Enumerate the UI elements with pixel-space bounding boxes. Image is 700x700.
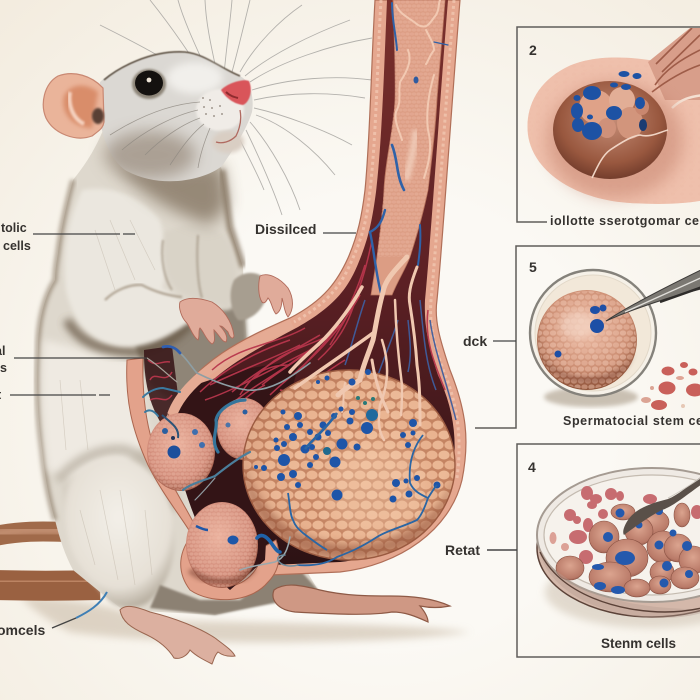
lower body fur — [150, 570, 318, 615]
nostril — [226, 92, 238, 98]
muzzle — [196, 89, 244, 131]
panel: middle — [463, 246, 700, 428]
lower left fur — [42, 340, 150, 480]
sheath: cord and scrotal wall — [165, 0, 466, 575]
panel frame: bottom — [517, 444, 700, 657]
panel frame: top — [517, 27, 700, 222]
blue and grey vessels in cavity — [143, 346, 310, 570]
cell sphere — [537, 290, 637, 390]
petri dish — [537, 468, 700, 628]
interior cavity — [180, 0, 455, 565]
callout: retat — [445, 542, 517, 558]
red cells scattered — [641, 362, 700, 410]
large cell clusters — [556, 503, 700, 597]
hand: right — [259, 275, 292, 317]
caption: top panel: iollotte sserotgomar cel — [550, 214, 700, 228]
callout: dissilced — [255, 221, 356, 237]
callout: tolic cells: cells — [3, 239, 31, 253]
dish front rim — [538, 545, 700, 618]
upper dark cavity — [144, 346, 178, 425]
reproductive cut-away — [127, 0, 466, 600]
nose — [221, 80, 251, 105]
dish shadow — [544, 387, 638, 407]
hand: left — [179, 298, 234, 344]
arm fold — [105, 285, 182, 300]
cord texture — [377, 0, 445, 257]
panel: bottom — [445, 444, 700, 657]
callout: tolic cells — [1, 221, 135, 253]
head — [99, 52, 253, 181]
big testis — [240, 257, 460, 565]
blue vessels on big testis — [288, 413, 437, 565]
callout: dck: dck — [463, 333, 487, 349]
dish shadow — [542, 579, 700, 630]
blue spots — [571, 71, 647, 140]
callout: al s — [0, 344, 147, 375]
callout: t — [0, 388, 110, 402]
red vessels — [148, 240, 445, 425]
small testis C — [186, 502, 258, 588]
spoon — [623, 474, 700, 535]
pink tissue — [527, 28, 700, 204]
fur edge shading — [37, 180, 73, 520]
cavity blue vessels — [345, 300, 456, 420]
small testis A — [147, 413, 215, 491]
arch band — [172, 324, 292, 415]
blue cells — [554, 304, 606, 358]
chest fold lines — [162, 235, 202, 298]
caption: bottom panel: Stenm cells — [601, 636, 676, 651]
caption: middle panel: Spermatocial stem ce — [563, 414, 700, 428]
lower dark cavity — [170, 360, 300, 590]
mouth — [216, 110, 241, 143]
panel frame: middle — [475, 246, 700, 428]
panel number: 5: 5 — [529, 259, 537, 275]
muzzle dots — [202, 97, 223, 117]
neck shading — [118, 165, 228, 225]
face whiskers — [110, 102, 210, 168]
callout: retat: Retat — [445, 542, 480, 558]
panel number: 4: 4 — [528, 459, 536, 475]
callout: omcels — [0, 592, 107, 638]
testis cross-section — [553, 81, 667, 179]
thigh — [63, 457, 175, 608]
crack line — [592, 130, 668, 178]
panel number: 2: 2 — [529, 42, 537, 58]
callout: al s: s — [0, 361, 7, 375]
right arm — [231, 273, 266, 320]
head shading — [104, 131, 196, 179]
callout: dissilced: Dissilced — [255, 221, 316, 237]
round dish — [530, 270, 656, 396]
fur below arm — [135, 305, 250, 405]
blue dots on big testis — [254, 369, 440, 502]
callout: tolic cells: tolic — [1, 221, 27, 235]
rat — [37, 52, 450, 664]
chest right edge shading — [222, 170, 243, 267]
cord highlight — [406, 130, 416, 180]
eye — [132, 69, 166, 99]
blue spots on cells — [592, 507, 693, 594]
spermatic cord — [371, 0, 445, 295]
dish inner — [537, 468, 700, 602]
tendrils from cord — [290, 257, 420, 440]
callout: dck — [463, 333, 516, 349]
rat body — [37, 120, 318, 615]
cord blue vessels — [370, 3, 448, 293]
small testis B — [217, 398, 271, 460]
ear — [43, 74, 104, 138]
hind foot: left — [120, 606, 235, 664]
fur strokes — [60, 220, 155, 585]
upper body fur — [65, 189, 190, 346]
shoulder shadow under lobe — [67, 320, 190, 352]
dish body — [536, 542, 700, 618]
small red cells — [550, 486, 700, 564]
wall texture — [294, 0, 459, 478]
cord strands — [395, 0, 440, 178]
chest — [163, 225, 236, 310]
forehead highlight — [167, 62, 223, 94]
chin — [212, 131, 244, 153]
forceps — [606, 268, 700, 321]
tail — [0, 529, 100, 586]
thigh shadow above — [58, 450, 175, 510]
panel: top — [517, 27, 700, 228]
head top outline — [104, 52, 240, 80]
hind foot: right — [273, 585, 450, 622]
ground shadow — [20, 596, 470, 643]
body wall band — [127, 358, 279, 600]
whiskers — [100, 0, 372, 215]
